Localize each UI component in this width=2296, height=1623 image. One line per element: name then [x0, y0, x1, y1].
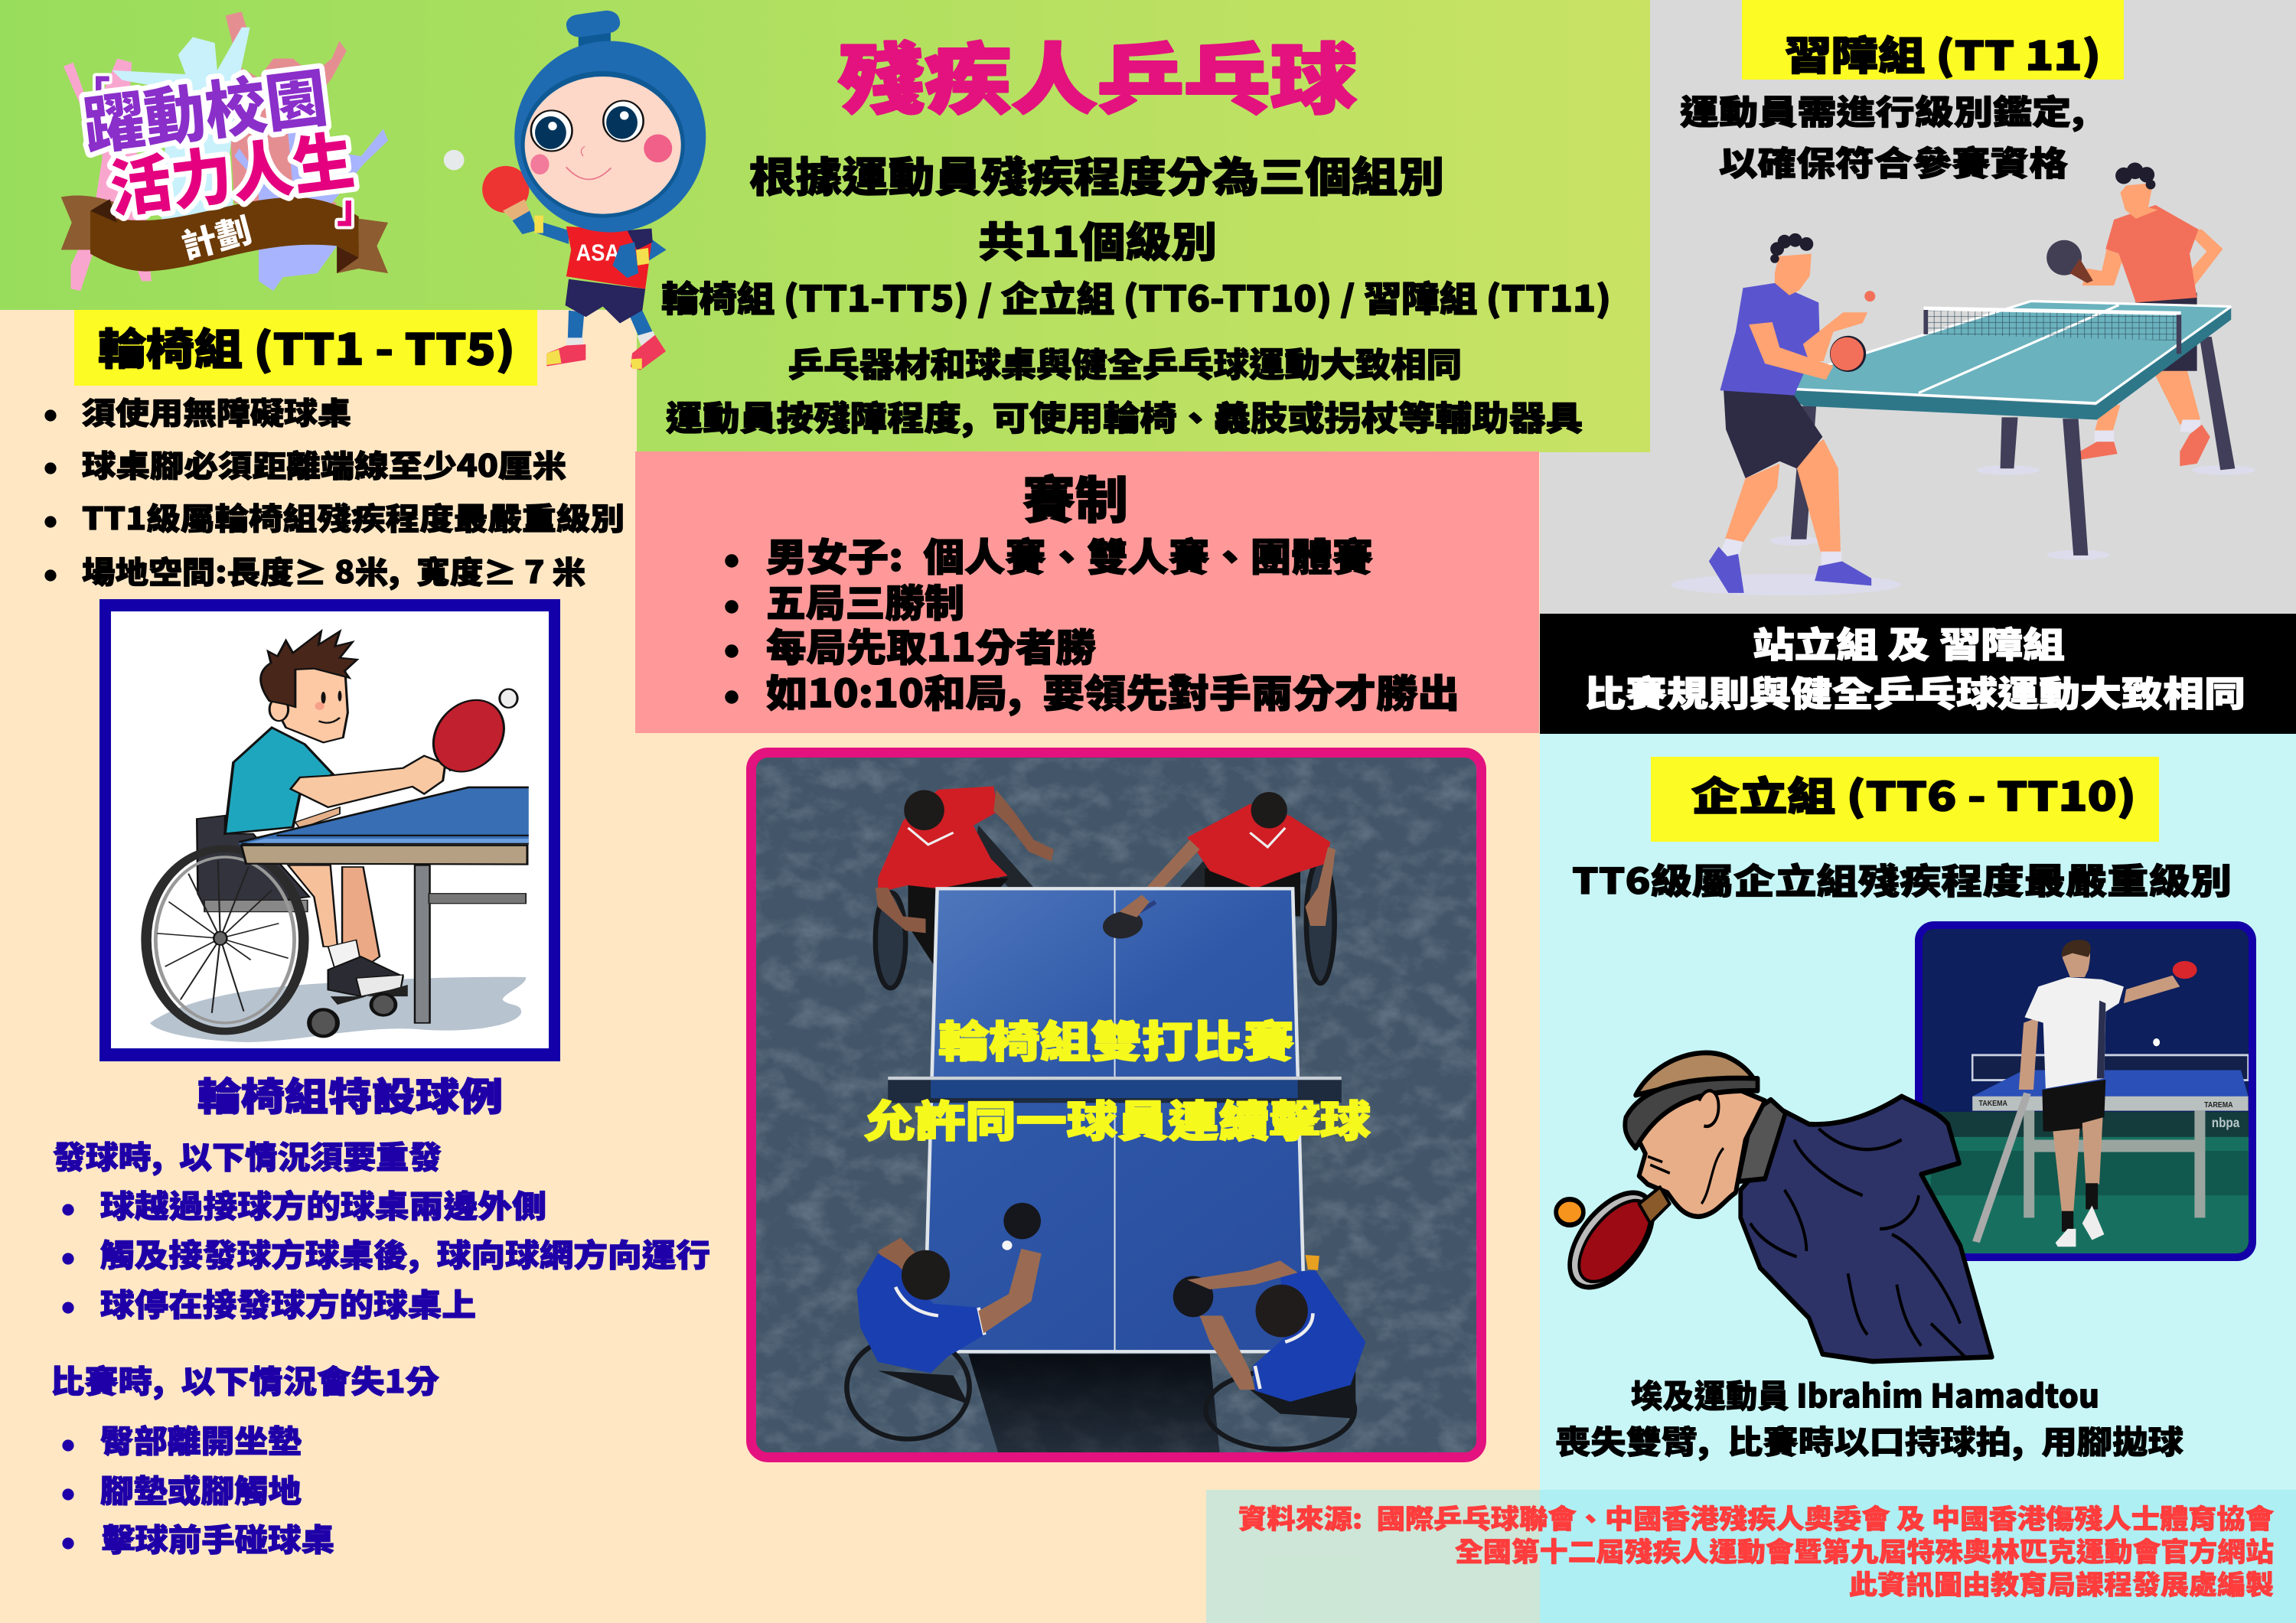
text block: competition format: 男女子: 個人賽、雙人賽、團體賽	[766, 527, 1373, 582]
heading tag: standing class	[1651, 757, 2159, 842]
panel: black rule note	[1540, 614, 2296, 734]
text block: classification summary: 共11個級別	[978, 208, 1217, 269]
note: standing and intellectual rules: 比賽規則與健全乒乓球運動大致相同	[1584, 666, 2245, 717]
list: serve let rules: 觸及接發球方球桌後, 球向球網方向運行	[100, 1230, 710, 1276]
panel: page background cream	[0, 310, 1540, 1623]
text block: classification summary: 運動員按殘障程度, 可使用輪椅、義肢或拐杖等輔助器具	[666, 391, 1583, 440]
logo silhouettes	[61, 11, 388, 291]
text block: classification assessment: 運動員需進行級別鑑定,	[1680, 85, 2085, 134]
text block: classification assessment: 以確保符合參賽資格	[1719, 136, 2068, 185]
text block: competition format: 每局先取11分者勝	[766, 618, 1096, 673]
list: point loss rules: 腳墊或腳觸地	[100, 1465, 302, 1511]
caption: athlete description: 喪失雙臂, 比賽時以口持球拍, 用腳拋球	[1555, 1417, 2183, 1463]
logo: campus programme	[61, 11, 388, 291]
headband	[1625, 1078, 1758, 1148]
logo title line 2: 活力人生	[104, 109, 358, 230]
photo: wheelchair doubles match	[752, 753, 1482, 1457]
logo ribbon text: 計劃	[175, 203, 256, 269]
paddle	[1555, 1176, 1668, 1304]
list: point loss rules	[51, 1356, 439, 1560]
caption: athlete description: 埃及運動員 Ibrahim Hamadtou	[1631, 1371, 2099, 1417]
logo title line 1: 躍動校園	[77, 47, 332, 168]
panel: competition format pink	[635, 451, 1539, 733]
collar	[1738, 1100, 1786, 1181]
list: point loss rules: 臀部離開坐墊	[100, 1416, 302, 1462]
list: point loss rules: 比賽時, 以下情況會失1分	[51, 1356, 439, 1402]
jacket folds	[1750, 1129, 1965, 1357]
heading tag: intellectual impairment class	[1742, 0, 2124, 81]
ball	[1556, 1199, 1583, 1225]
panel: source footer band	[1206, 1490, 2296, 1623]
caption: athlete description	[1555, 1371, 2183, 1463]
illustration: Ibrahim Hamadtou	[1555, 1053, 1992, 1361]
list: point loss rules: 擊球前手碰球桌	[102, 1514, 334, 1560]
list: serve let rules	[53, 1132, 710, 1325]
note: standing and intellectual rules	[1584, 618, 2245, 717]
heading tag: wheelchair class	[74, 310, 537, 386]
heading: wheelchair special rules: 輪椅組特設球例	[197, 1067, 503, 1122]
photo: standing player with crutch: TAKEMA	[1979, 1099, 2007, 1108]
list: wheelchair requirements: TT1級屬輪椅組殘疾程度最嚴重級別	[82, 494, 625, 539]
text block: classification summary	[661, 144, 1611, 440]
face lines	[1648, 1148, 1724, 1204]
footer: sources	[1238, 1498, 2274, 1602]
footer: sources: 全國第十二屆殘疾人運動會暨第九屆特殊奧林匹克運動會官方網站	[1455, 1530, 2274, 1570]
list: wheelchair requirements: 場地空間:長度≥ 8米, 寬度≥ 7 米	[82, 548, 585, 592]
heading tag: intellectual impairment class: 習障組 (TT 11)	[1785, 24, 2101, 81]
hair cap	[1636, 1053, 1758, 1095]
text block: classification summary: 乒乓器材和球桌與健全乒乓球運動大致相同	[788, 337, 1462, 386]
mascot holding paddle: ASA	[576, 240, 620, 266]
photo: standing player with crutch	[1919, 925, 2253, 1263]
text block: competition format: 如10:10和局, 要領先對手兩分才勝出	[766, 663, 1459, 719]
heading: main title: 殘疾人乒乓球	[838, 18, 1357, 129]
list: wheelchair requirements: 須使用無障礙球桌	[82, 389, 351, 433]
logo closing bracket: 」	[337, 176, 377, 234]
note: standing and intellectual rules: 站立組 及 習障組	[1753, 618, 2065, 668]
text block: classification summary: 輪椅組 (TT1-TT5) / 企立組 (TT6-TT10) / 習障組 (TT11)	[661, 272, 1611, 322]
photo caption line 2: 允許同一球員連續擊球	[864, 1088, 1371, 1149]
head	[1636, 1084, 1765, 1217]
ear	[1699, 1090, 1719, 1126]
illustration: two standing players at table	[1671, 162, 2255, 595]
text block: competition format: 賽制	[1022, 460, 1128, 533]
illustration: wheelchair player	[99, 599, 560, 1061]
text block: TT6 severity: TT6級屬企立組殘疾程度最嚴重級別	[1572, 854, 2232, 904]
panel: grey intellectual impairment section	[1540, 0, 2296, 614]
jacket body	[1740, 1097, 1992, 1361]
text block: competition format	[726, 460, 1459, 719]
photo: standing player with crutch: TAREMA	[2204, 1100, 2233, 1110]
list: wheelchair requirements	[45, 389, 625, 592]
photo: standing player with crutch: nbpa	[2212, 1116, 2240, 1130]
footer: sources: 資料來源: 國際乒乓球聯會、中國香港殘疾人奧委會 及 中國香港傷殘人士體育協會	[1238, 1498, 2274, 1537]
footer: sources: 此資訊圖由教育局課程發展處編製	[1849, 1564, 2274, 1602]
logo opening bracket: 「	[70, 64, 110, 122]
list: serve let rules: 球越過接球方的球桌兩邊外側	[100, 1181, 546, 1227]
panel: green header	[0, 0, 1650, 452]
text block: classification assessment	[1680, 85, 2085, 185]
heading tag: wheelchair class: 輪椅組 (TT1 - TT5)	[98, 315, 515, 378]
list: serve let rules: 發球時, 以下情況須要重發	[53, 1132, 442, 1178]
mascot holding paddle	[444, 9, 706, 370]
text block: classification summary: 根據運動員殘疾程度分為三個組別	[749, 144, 1444, 204]
photo caption line 1: 輪椅組雙打比賽	[938, 1009, 1294, 1070]
text block: competition format: 五局三勝制	[766, 573, 964, 628]
panel: standing class cyan	[1540, 734, 2296, 1623]
list: wheelchair requirements: 球桌腳必須距離端線至少40厘米	[82, 442, 566, 486]
heading tag: standing class: 企立組 (TT6 - TT10)	[1691, 765, 2136, 822]
list: serve let rules: 球停在接發球方的球桌上	[100, 1279, 476, 1325]
